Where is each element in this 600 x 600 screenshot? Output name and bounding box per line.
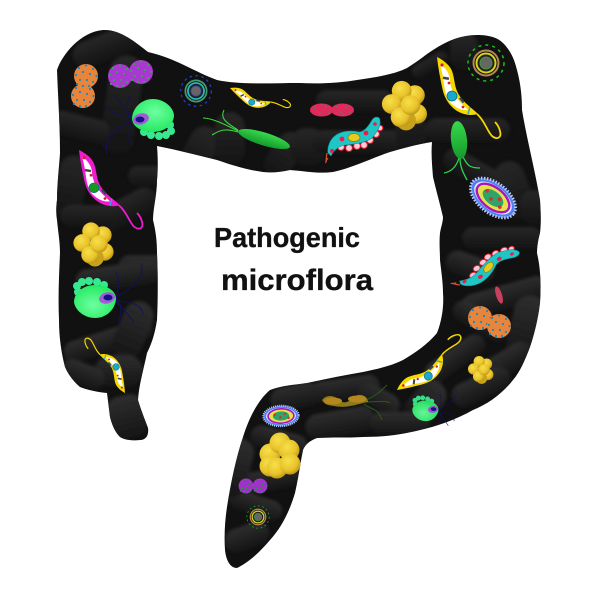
red diplococcus, top <box>310 104 354 116</box>
title: Pathogenic microflora <box>214 222 373 297</box>
green flagellated cell, lower left <box>73 263 143 322</box>
spiky oval virus, bottom <box>263 405 299 427</box>
cyan trypanosome with frill, lower right <box>451 236 522 296</box>
purple diplococcus, top left <box>108 60 153 88</box>
title: Pathogenic microflora: Pathogenic <box>214 222 360 253</box>
dim curved bacteria with flagella, bottom centre <box>322 385 390 420</box>
orange diplococcus, lower right <box>468 306 511 338</box>
yellow trypanosome, top <box>230 65 291 129</box>
small purple diplococcus, bottom <box>239 479 267 493</box>
orange diplococcus, top left <box>71 64 98 108</box>
yellow cluster, left <box>73 222 114 267</box>
ring virus, top right <box>468 45 504 81</box>
yellow cluster, top right <box>382 81 427 130</box>
cyan trypanosome with frill, top <box>326 117 383 163</box>
green flagellated cell, top left <box>105 95 175 154</box>
spiky oval virus, right <box>463 170 523 226</box>
faint red rod, lower right <box>493 286 505 304</box>
large yellow cluster, bottom <box>260 432 300 478</box>
yellow trypanosome, lower left <box>83 338 127 393</box>
panel: intestine silhouette <box>56 30 541 568</box>
green rod bacterium, right <box>444 120 480 180</box>
green rod bacterium, top <box>203 110 292 153</box>
magenta trypanosome, left <box>79 150 142 229</box>
ring virus, top <box>181 76 211 106</box>
yellow trypanosome, top right <box>437 57 500 138</box>
title: Pathogenic microflora: microflora <box>221 264 373 297</box>
green flagellated cell, bottom centre <box>411 386 457 426</box>
small ring virus, bottom <box>247 506 269 528</box>
texture: translucent grey rods inside intestine <box>46 10 552 556</box>
yellow trypanosome, lower right <box>394 335 463 390</box>
small yellow cluster, lower right <box>468 356 493 384</box>
